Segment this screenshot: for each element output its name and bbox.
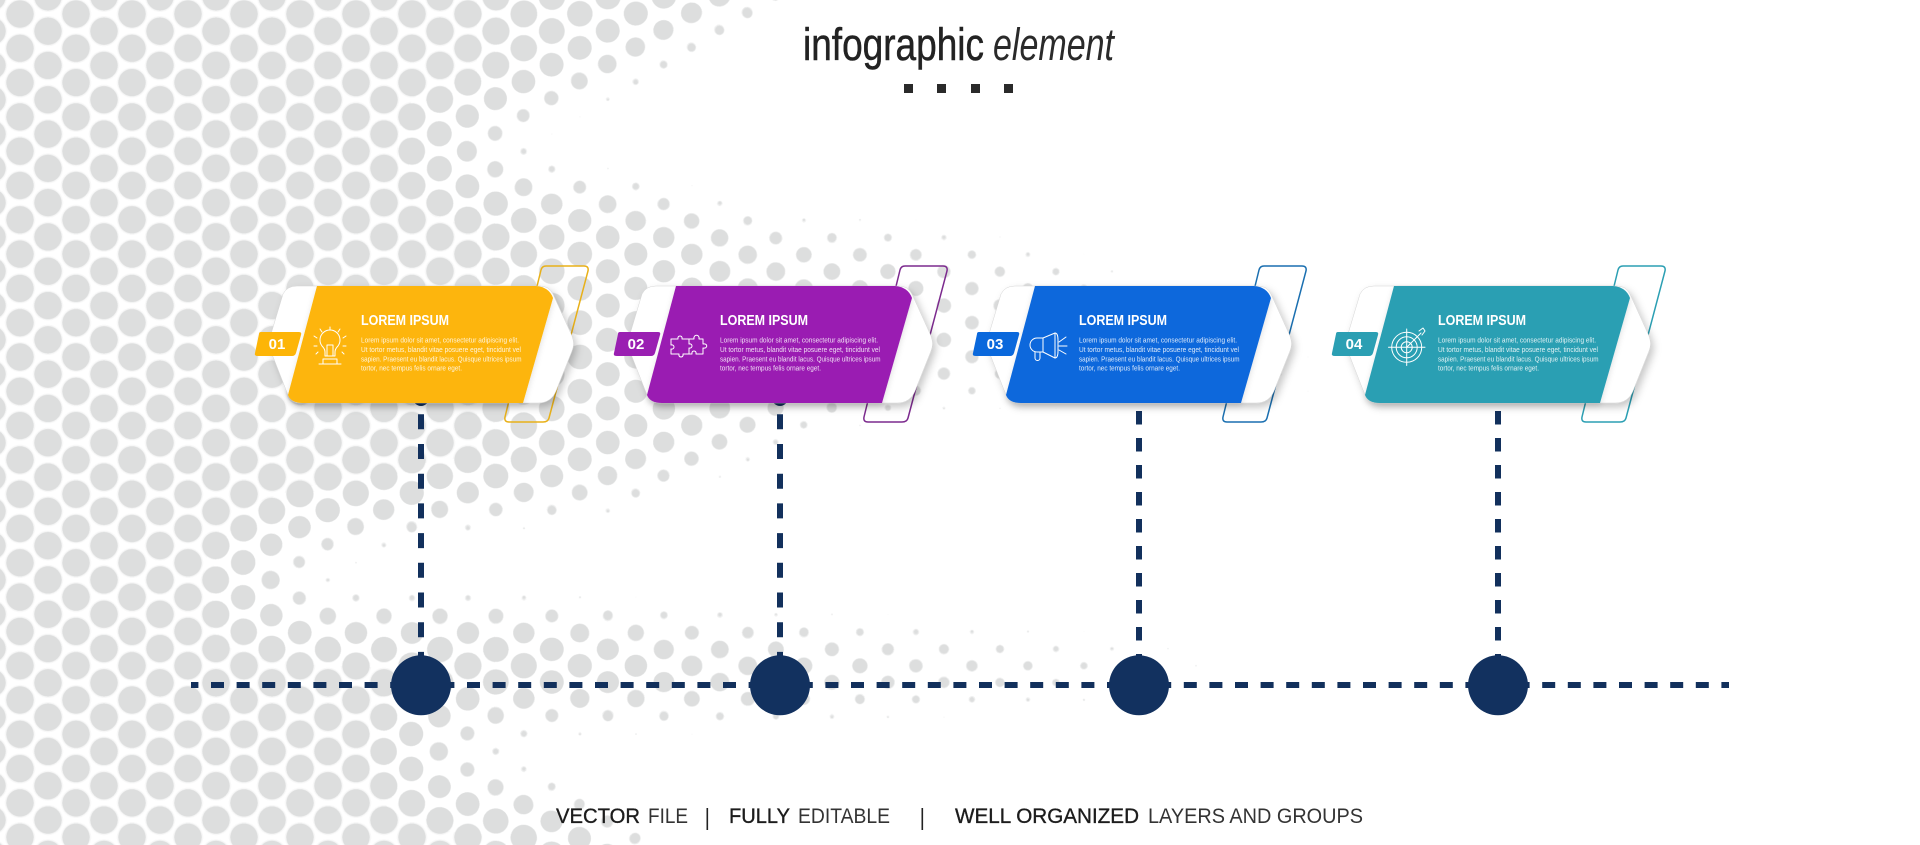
title: element — [993, 19, 1116, 70]
card 04 body text: Ut tortor metus, blandit vitae posuere eget, tincidunt vel — [1438, 345, 1598, 354]
card 03 body text: Lorem ipsum dolor sit amet, consectetur adipiscing elit. — [1079, 336, 1237, 345]
card 02 outline frame — [864, 266, 947, 422]
card 03 number tab — [973, 332, 1019, 356]
card 04 — [1332, 266, 1665, 422]
card 04 coloured panel — [1365, 286, 1630, 403]
footer caption: EDITABLE — [798, 805, 890, 828]
card 02 body text — [720, 336, 880, 373]
card 01 body text: tortor, nec tempus felis ornare eget. — [361, 364, 462, 373]
card 03 white hexagon — [986, 286, 1292, 403]
card 01 number tab: 01 — [269, 336, 285, 353]
icon: target with arrow — [1388, 328, 1425, 366]
footer caption: VECTOR — [556, 805, 640, 828]
footer caption — [556, 805, 1363, 830]
card 02 heading: LOREM IPSUM — [720, 313, 808, 329]
card 01 body text: Lorem ipsum dolor sit amet, consectetur adipiscing elit. — [361, 336, 519, 345]
timeline nodes — [391, 655, 1528, 715]
card 01 heading: LOREM IPSUM — [361, 313, 449, 329]
card 04 number tab: 04 — [1346, 336, 1363, 353]
card 02 body text: Lorem ipsum dolor sit amet, consectetur adipiscing elit. — [720, 336, 878, 345]
card 03 body text: Ut tortor metus, blandit vitae posuere eget, tincidunt vel — [1079, 345, 1239, 354]
card 01 number tab — [255, 332, 301, 356]
footer caption: LAYERS AND GROUPS — [1148, 805, 1363, 828]
card 04 body text: Lorem ipsum dolor sit amet, consectetur adipiscing elit. — [1438, 336, 1596, 345]
card 03 number tab: 03 — [987, 336, 1003, 353]
card 03 coloured panel — [1006, 286, 1271, 403]
card 02 number tab: 02 — [628, 336, 644, 353]
connector caps under cards — [413, 390, 788, 406]
card 01 white hexagon — [268, 286, 574, 403]
card 03 body text: tortor, nec tempus felis ornare eget. — [1079, 364, 1180, 373]
footer caption: FILE — [648, 805, 688, 828]
card 02 number tab — [614, 332, 660, 356]
card 02 — [614, 266, 947, 422]
card 01 body text: Ut tortor metus, blandit vitae posuere eget, tincidunt vel — [361, 345, 521, 354]
card 04 white hexagon — [1345, 286, 1650, 403]
card 02 white hexagon — [627, 286, 932, 403]
icon: puzzle pieces — [671, 335, 707, 357]
footer caption: WELL ORGANIZED — [955, 805, 1139, 828]
card 04 body text: sapien. Praesent eu blandit lacus. Quisque ultrices ipsum — [1438, 354, 1598, 363]
title square markers — [904, 84, 1013, 93]
icon: megaphone — [1030, 333, 1067, 360]
connector dashed lines — [421, 411, 1498, 668]
card 01 — [255, 266, 588, 422]
card 01 body text: sapien. Praesent eu blandit lacus. Quisque ultrices ipsum — [361, 354, 522, 363]
card 03 — [973, 266, 1306, 422]
card 03 heading: LOREM IPSUM — [1079, 313, 1167, 329]
card 04 body text — [1438, 336, 1598, 373]
footer caption: FULLY — [729, 805, 790, 828]
timeline dashed line — [191, 682, 1729, 688]
card 04 number tab — [1332, 332, 1378, 356]
card 01 coloured panel — [288, 286, 553, 403]
title: infographic — [803, 19, 984, 70]
card 04 outline frame — [1582, 266, 1665, 422]
card 01 outline frame — [505, 266, 588, 422]
card 04 heading: LOREM IPSUM — [1438, 313, 1526, 329]
card 02 coloured panel — [647, 286, 912, 403]
card 01 body text — [361, 336, 522, 373]
card 03 outline frame — [1223, 266, 1306, 422]
icon: light bulb — [314, 327, 346, 364]
card 02 body text: Ut tortor metus, blandit vitae posuere eget, tincidunt vel — [720, 345, 880, 354]
card 02 body text: tortor, nec tempus felis ornare eget. — [720, 364, 821, 373]
card 02 body text: sapien. Praesent eu blandit lacus. Quisque ultrices ipsum — [720, 354, 880, 363]
card 04 body text: tortor, nec tempus felis ornare eget. — [1438, 364, 1539, 373]
card 03 body text — [1079, 336, 1240, 373]
card 03 body text: sapien. Praesent eu blandit lacus. Quisque ultrices ipsum — [1079, 354, 1240, 363]
